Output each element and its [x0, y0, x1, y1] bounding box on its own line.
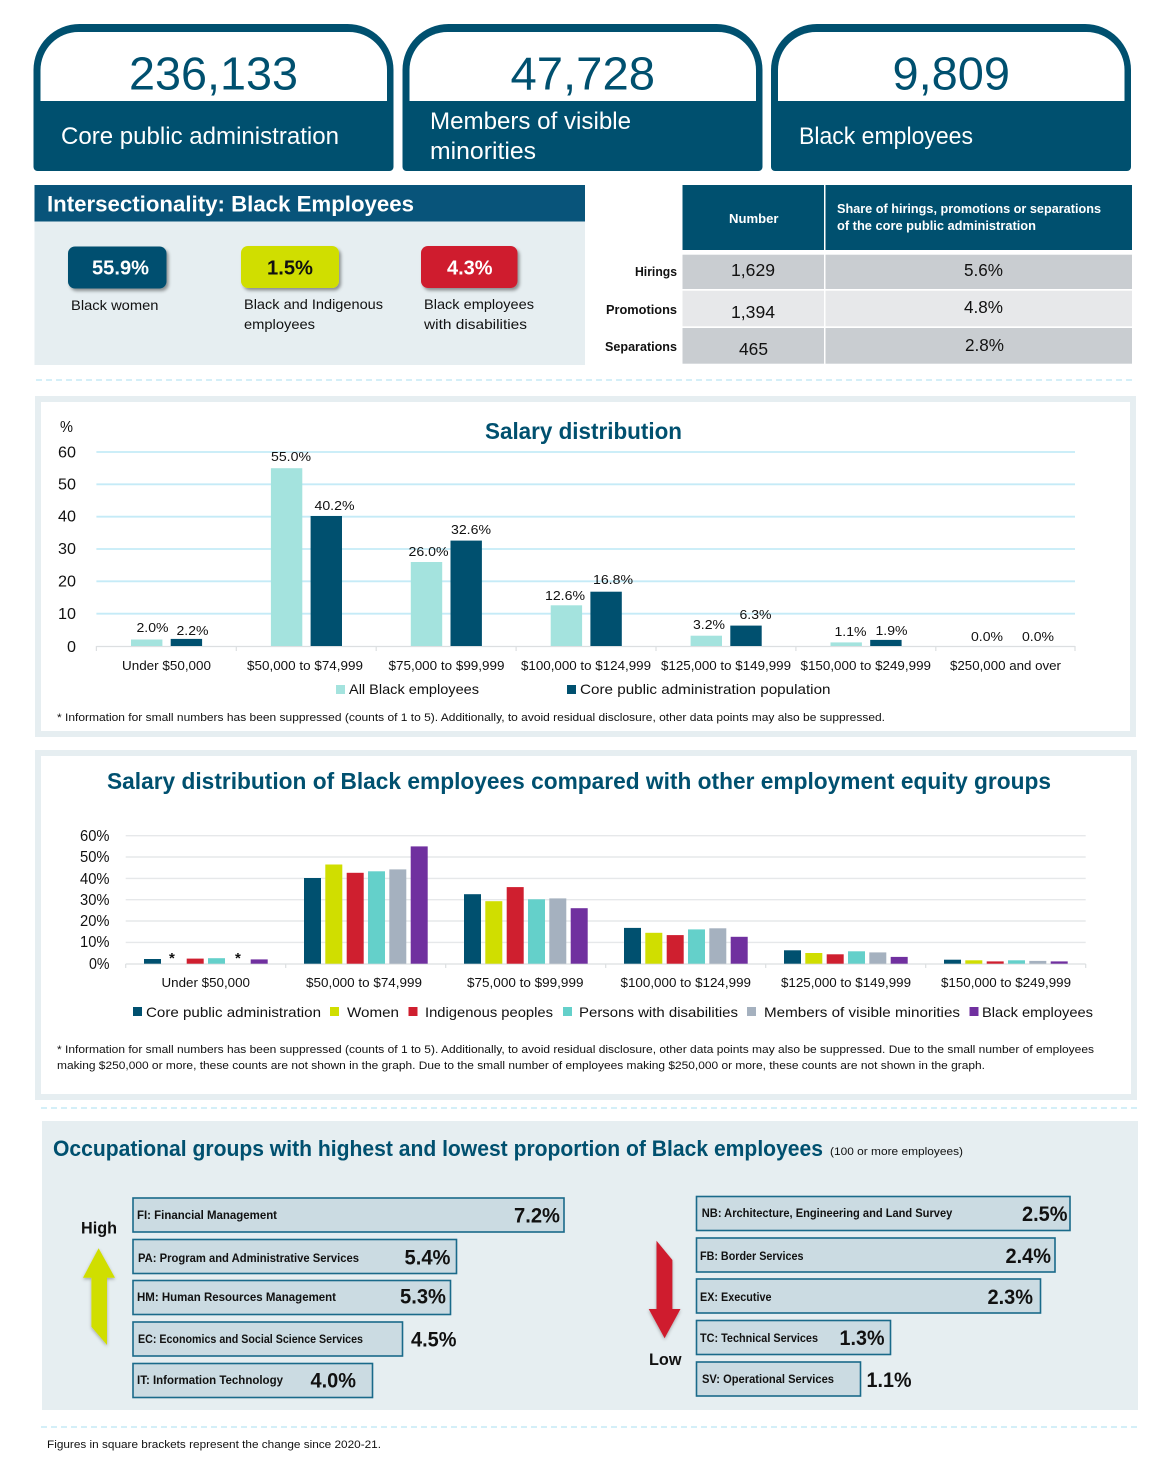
- stat card: members of visible minorities: Members of visible: [430, 108, 631, 135]
- bar chart: salary distribution: [58, 419, 1075, 673]
- stat card: Black employees: 9,809: [892, 48, 1010, 100]
- y axis labels: 0: [67, 639, 76, 656]
- y axis labels: [80, 828, 110, 973]
- y axis labels: 50%: [80, 849, 110, 866]
- panel: intersectionality: [34, 185, 585, 365]
- bar: NB: NB: Architecture, Engineering and Land Survey: [702, 1208, 953, 1220]
- stat: Black employees with disabilities: [421, 246, 534, 332]
- data labels: 3.2%: [693, 617, 725, 632]
- category labels: $150,000 to $249,999: [800, 658, 931, 673]
- table header: share: of the core public administration: [837, 219, 1036, 233]
- bar: EX: [696, 1279, 1040, 1313]
- panel: salary distribution: [38, 399, 1133, 734]
- table row: promotions: 1,394: [731, 302, 775, 322]
- stat card: members of visible minorities: 47,728: [510, 48, 655, 100]
- heading: occupational groups: Occupational groups with highest and lowest proportion of Black employees: [53, 1136, 823, 1161]
- y axis labels: 50: [58, 476, 76, 494]
- table header: number: Number: [729, 212, 779, 226]
- y axis labels: 20: [58, 574, 76, 590]
- data labels: 26.0%: [408, 544, 449, 559]
- stat: Black employees with disabilities: with disabilities: [423, 316, 527, 332]
- category labels: [162, 975, 1071, 990]
- stat card: Black employees: [771, 24, 1131, 171]
- y axis labels: 40%: [80, 871, 110, 888]
- table row: separations: 465: [739, 339, 768, 359]
- legend: employment equity groups: Black employees: [982, 1004, 1093, 1020]
- bar: NB: [696, 1196, 1070, 1230]
- bar chart: employment equity groups: [80, 828, 1086, 990]
- bar: EC: 4.5%: [411, 1328, 456, 1352]
- footer note: Figures in square brackets represent the change since 2020-21.: [47, 1439, 381, 1451]
- data labels: 40.2%: [314, 498, 355, 513]
- legend: employment equity groups: Core public administration: [146, 1004, 321, 1020]
- data labels: 1.1%: [834, 624, 867, 639]
- stat card: Black employees: Black employees: [799, 123, 973, 150]
- legend: salary distribution: [336, 681, 830, 697]
- bar: FI: [133, 1198, 564, 1232]
- bar: FI: 7.2%: [514, 1204, 560, 1228]
- y axis labels: 30%: [80, 892, 110, 909]
- heading: intersectionality: Intersectionality: Black Employees: [47, 192, 414, 216]
- bar: FI: FI: Financial Management: [137, 1210, 277, 1222]
- y axis labels: 0%: [89, 956, 110, 973]
- category labels: Under $50,000: [122, 658, 211, 673]
- suppressed data markers: [169, 950, 241, 967]
- bar: EC: [133, 1322, 456, 1356]
- legend: employment equity groups: Members of visible minorities: [764, 1004, 960, 1020]
- stat: Black employees with disabilities: Black employees: [424, 296, 534, 312]
- bar: PA: 5.4%: [404, 1246, 450, 1270]
- bar: TC: 1.3%: [840, 1326, 884, 1350]
- heading: intersectionality: [34, 185, 585, 222]
- y axis labels: 40: [58, 508, 76, 526]
- footnote: employment equity groups: * Information for small numbers has been suppressed (counts of 1 to 5). Additionally, to avoid residual disclosure, other data points may also be suppressed. Due to the small number of employees: [57, 1044, 1095, 1056]
- bars: women: [325, 864, 982, 964]
- bar: PA: PA: Program and Administrative Services: [138, 1253, 359, 1265]
- stat card: members of visible minorities: [402, 24, 762, 171]
- table row: separations: Separations: [605, 340, 677, 354]
- table header: share: [826, 185, 1132, 250]
- data labels: 55.0%: [271, 449, 311, 464]
- heading: comparison: Salary distribution of Black employees compared with other employment equity groups: [107, 768, 1051, 794]
- stat card: core public administration: 236,133: [129, 48, 298, 100]
- icon: down arrow: [649, 1241, 680, 1338]
- table header: share: Share of hirings, promotions or separations: [837, 202, 1101, 216]
- footnote: employment equity groups: [57, 1044, 1095, 1072]
- table row: separations: 2.8%: [965, 335, 1004, 355]
- table: hirings, promotions and separations: [605, 185, 1132, 364]
- bars: members of visible minorities: [389, 869, 1046, 964]
- table row: promotions: Promotions: [606, 303, 677, 317]
- stat: Black and Indigenous employees: [241, 246, 383, 332]
- legend: employment equity groups: Women: [347, 1004, 399, 1020]
- bar: IT: IT: Information Technology: [137, 1375, 284, 1387]
- y axis labels: 60%: [80, 828, 110, 845]
- bar: FB: 2.4%: [1006, 1244, 1051, 1268]
- stat card: members of visible minorities: minorities: [430, 138, 536, 165]
- legend: salary distribution: Core public administration population: [580, 681, 830, 697]
- y axis labels: 20%: [80, 913, 110, 930]
- bars: lowest groups: [696, 1196, 1070, 1396]
- category labels: $100,000 to $124,999: [620, 975, 751, 990]
- bar: IT: [133, 1364, 372, 1398]
- stat: Black and Indigenous employees: 1.5%: [267, 258, 313, 280]
- data labels: 12.6%: [545, 588, 585, 603]
- table row: promotions: [606, 291, 1132, 326]
- category labels: $125,000 to $149,999: [661, 658, 791, 673]
- heading: occupational groups: (100 or more employees): [830, 1146, 963, 1158]
- bar: HM: 5.3%: [400, 1284, 446, 1308]
- stat card: core public administration: [34, 24, 394, 171]
- stat: Black employees with disabilities: 4.3%: [447, 258, 493, 280]
- bars: highest groups: [133, 1198, 564, 1398]
- y axis labels: 30: [58, 541, 76, 558]
- bar: PA: [133, 1240, 456, 1274]
- bar: EC: EC: Economics and Social Science Services: [138, 1334, 363, 1346]
- table row: promotions: 4.8%: [964, 297, 1003, 317]
- data labels: 6.3%: [740, 607, 772, 622]
- bar: IT: 4.0%: [310, 1368, 356, 1392]
- suppressed data markers: *: [235, 950, 241, 967]
- table header: number: [682, 185, 824, 250]
- category labels: $75,000 to $99,999: [467, 975, 584, 990]
- legend: salary distribution: All Black employees: [349, 681, 479, 697]
- category labels: $250,000 and over: [950, 658, 1062, 673]
- stat card: core public administration: Core public administration: [61, 123, 339, 150]
- bars: persons with disabilities: [208, 871, 1025, 964]
- table row: hirings: 1,629: [731, 260, 775, 280]
- footnote: employment equity groups: making $250,000 or more, these counts are not shown in the graph. Due to the small number of employees making $250,000 or more, these counts are not shown in the graph.: [57, 1060, 985, 1072]
- bar: TC: [696, 1320, 890, 1354]
- bars: Black employees: [251, 846, 1068, 964]
- category labels: $75,000 to $99,999: [388, 658, 504, 673]
- panel: salary distribution compared with other groups: [38, 753, 1134, 1097]
- bars: core public administration population: [171, 516, 902, 646]
- stat: Black women: [68, 246, 166, 313]
- bar: TC: TC: Technical Services: [700, 1333, 818, 1345]
- data labels: 0.0%: [1022, 629, 1054, 644]
- stat: Black women: 55.9%: [92, 258, 149, 280]
- bars: all Black employees: [131, 468, 862, 646]
- data labels: [136, 449, 1054, 644]
- legend: employment equity groups: Persons with disabilities: [579, 1004, 738, 1020]
- data labels: 2.2%: [176, 623, 209, 638]
- footnote: salary distribution: * Information for small numbers has been suppressed (counts of 1 to 5). Additionally, to avoid residual disclosure, other data points may also be suppressed.: [57, 712, 885, 724]
- legend: employment equity groups: [133, 1004, 1093, 1020]
- bar: EX: 2.3%: [988, 1285, 1033, 1309]
- bar: FB: [696, 1238, 1055, 1272]
- bar: HM: HM: Human Resources Management: [137, 1292, 336, 1304]
- stat: Black and Indigenous employees: Black and Indigenous: [244, 296, 383, 312]
- category labels: $125,000 to $149,999: [781, 975, 911, 990]
- bar: SV: [696, 1362, 912, 1396]
- data labels: 2.0%: [136, 620, 169, 635]
- data labels: 16.8%: [593, 572, 633, 587]
- category labels: [122, 658, 1062, 673]
- bar: SV: 1.1%: [866, 1368, 912, 1392]
- table row: separations: [605, 328, 1132, 364]
- category labels: $50,000 to $74,999: [247, 658, 363, 673]
- category labels: $50,000 to $74,999: [306, 975, 422, 990]
- y axis labels: 10%: [80, 934, 110, 951]
- icon: up arrow: [83, 1248, 115, 1345]
- panel: occupational groups: [42, 1121, 1138, 1410]
- legend: employment equity groups: Indigenous peoples: [425, 1004, 553, 1020]
- y axis labels: 60: [58, 444, 76, 462]
- table row: hirings: Hirings: [635, 265, 677, 279]
- data labels: 0.0%: [971, 629, 1003, 644]
- y axis labels: 10: [58, 606, 76, 623]
- category labels: $100,000 to $124,999: [521, 658, 651, 673]
- bar: FB: FB: Border Services: [700, 1251, 804, 1263]
- bar: SV: SV: Operational Services: [702, 1374, 834, 1386]
- table row: hirings: [635, 255, 1132, 289]
- stat: Black women: Black women: [71, 297, 158, 313]
- data labels: 1.9%: [876, 623, 908, 638]
- category labels: Under $50,000: [162, 975, 250, 990]
- bar: NB: 2.5%: [1022, 1202, 1068, 1226]
- bar: EX: EX: Executive: [700, 1292, 772, 1304]
- category labels: $150,000 to $249,999: [941, 975, 1071, 990]
- suppressed data markers: *: [169, 950, 175, 967]
- data labels: 32.6%: [451, 522, 491, 537]
- stat: Black and Indigenous employees: employees: [244, 316, 315, 332]
- bars: core public administration: [144, 878, 961, 964]
- high label: High: [81, 1218, 117, 1238]
- bar: HM: [133, 1280, 450, 1314]
- y axis labels: %: [60, 419, 73, 436]
- heading: salary distribution: Salary distribution: [485, 418, 682, 444]
- low label: Low: [649, 1350, 682, 1369]
- y axis labels: [58, 419, 76, 656]
- table row: hirings: 5.6%: [964, 260, 1003, 280]
- bars: Indigenous peoples: [187, 873, 1004, 964]
